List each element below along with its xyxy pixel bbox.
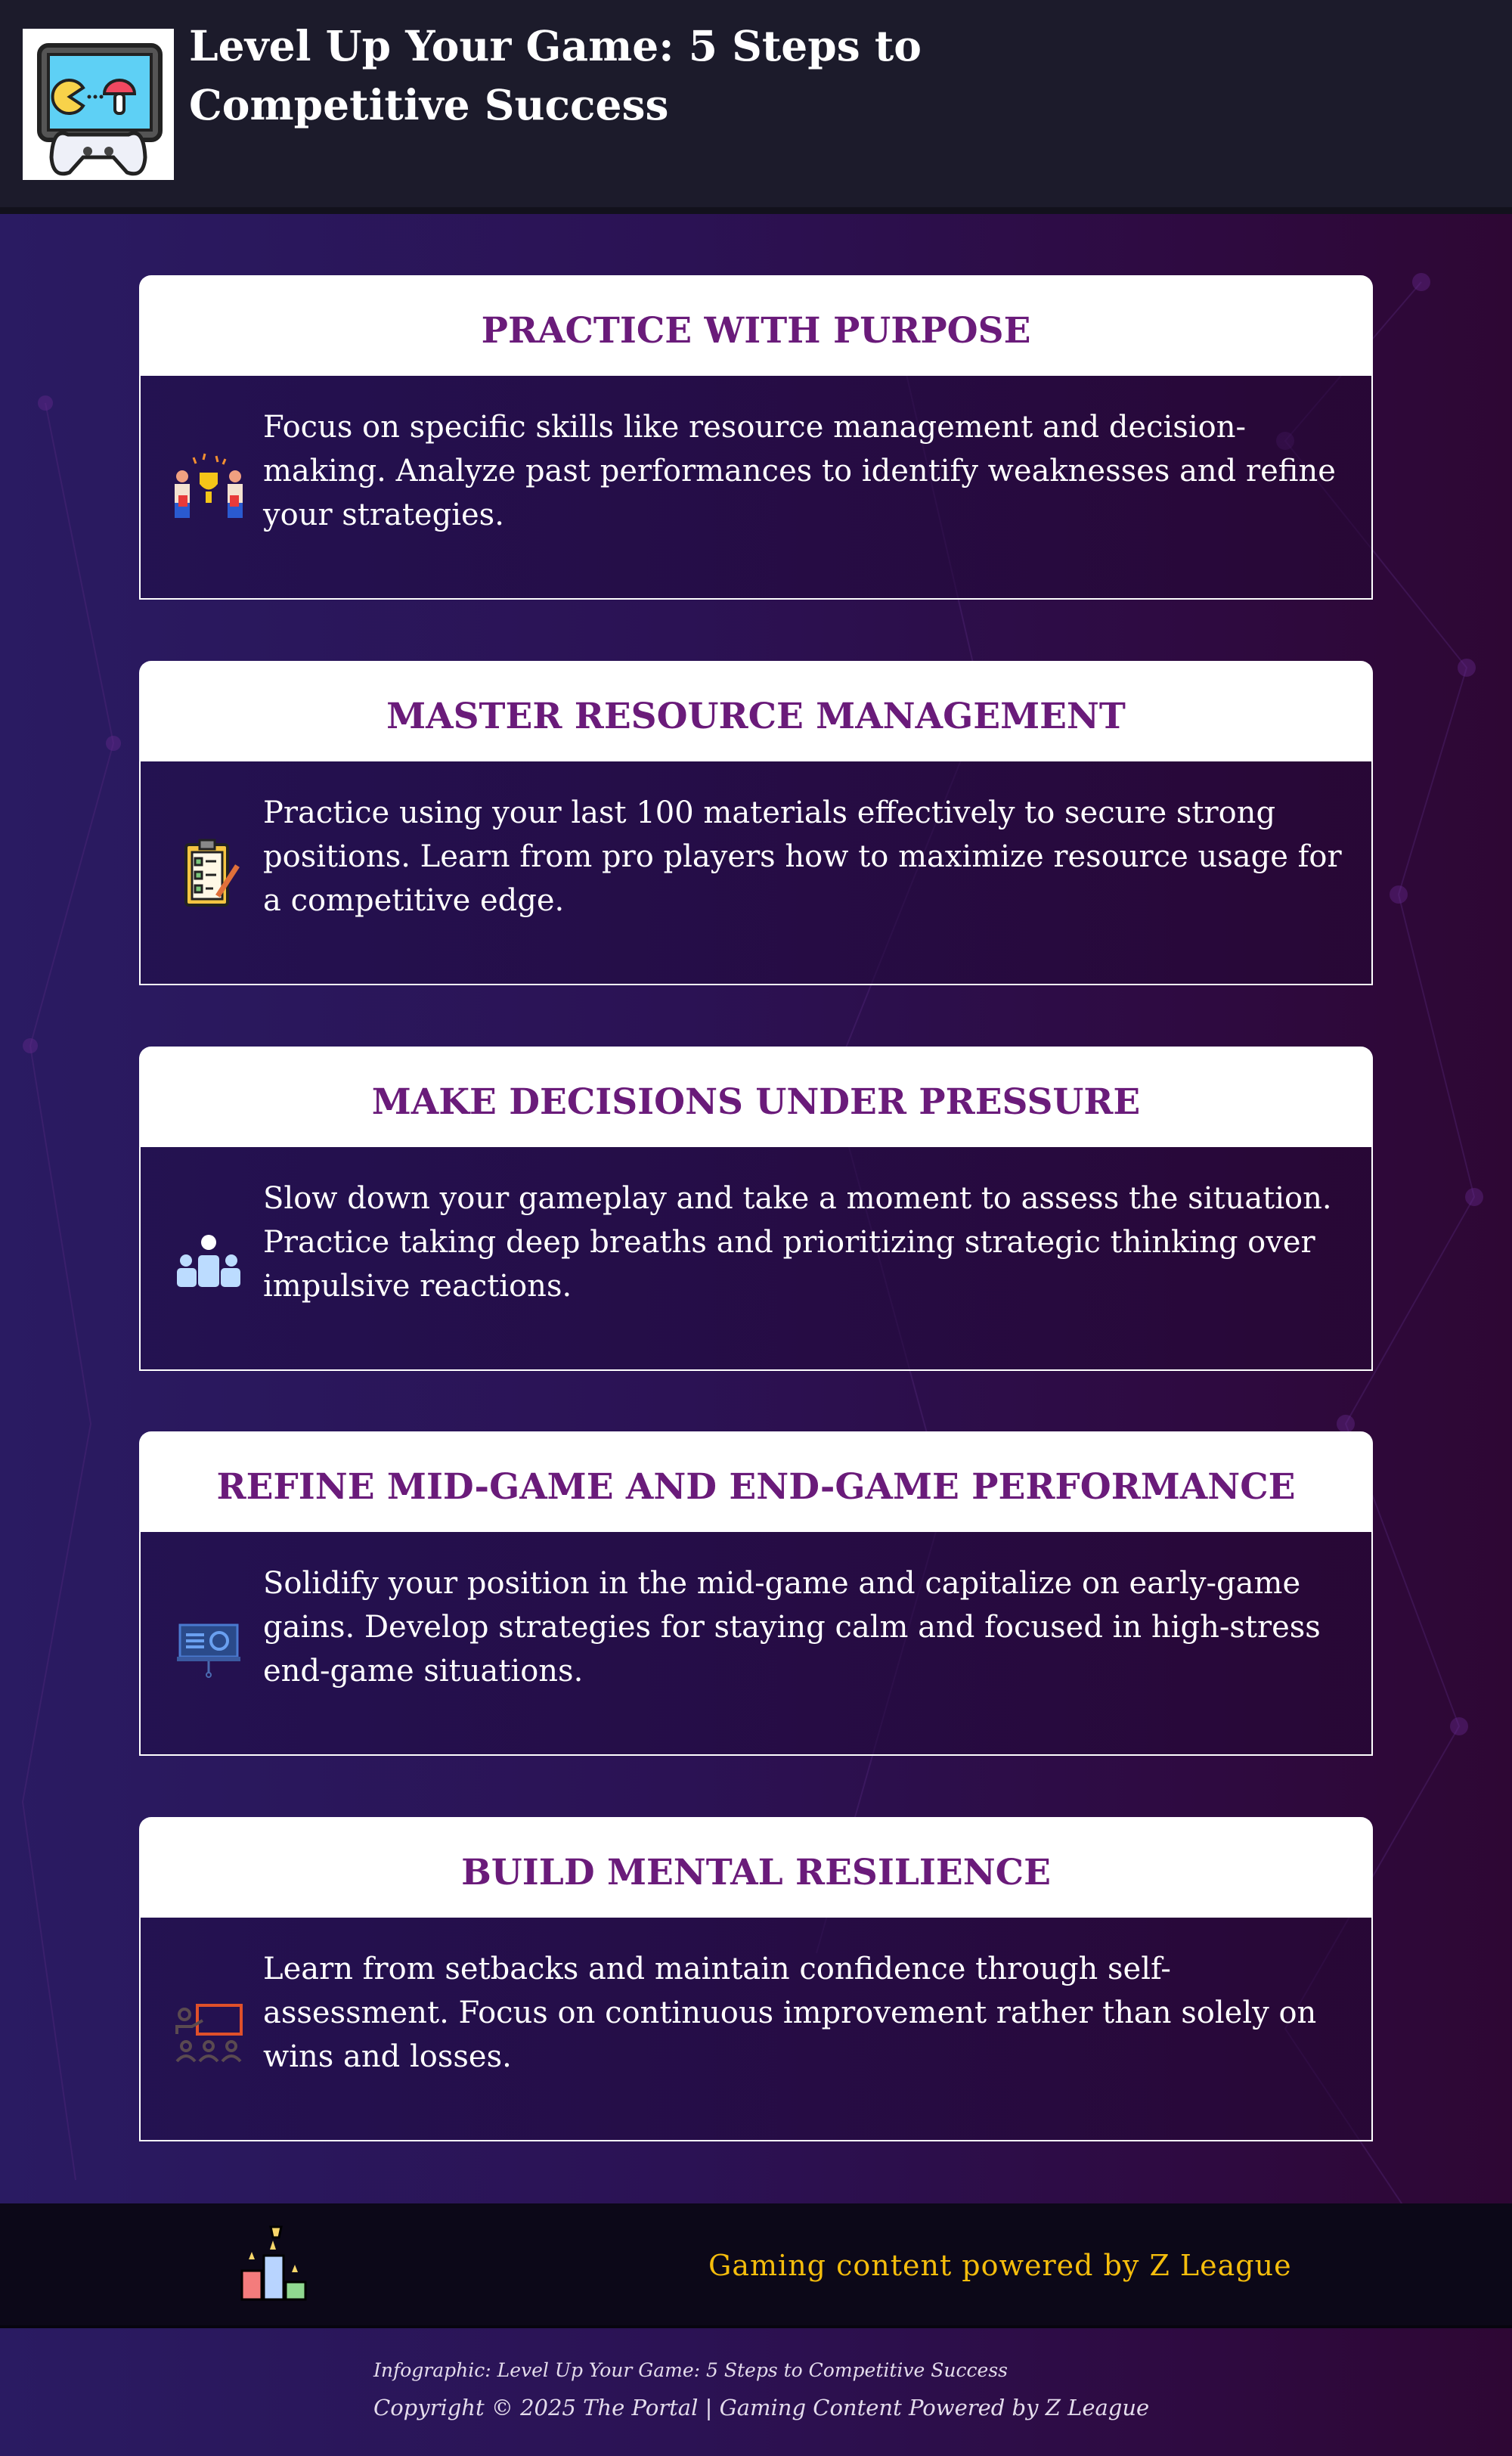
title: [189, 21, 922, 129]
text: Learn from setbacks and maintain confidence through self-: [263, 1952, 1171, 1986]
caption: Infographic: Level Up Your Game: 5 Steps to Competitive Success: [373, 2359, 1008, 2381]
text: assessment. Focus on continuous improvement rather than solely on: [263, 1996, 1316, 2030]
icon: classroom presentation: [175, 2004, 243, 2062]
icon: podium people: [177, 1235, 240, 1287]
panel: master resource management: [139, 661, 1373, 985]
heading: MAKE DECISIONS UNDER PRESSURE: [372, 1081, 1140, 1123]
text: your strategies.: [263, 498, 504, 532]
text: [263, 1566, 1321, 1688]
heading: BUILD MENTAL RESILIENCE: [461, 1852, 1051, 1893]
footer text: Gaming content powered by Z League: [708, 2249, 1292, 2282]
text: impulsive reactions.: [263, 1269, 572, 1304]
panel: make decisions under pressure: [139, 1047, 1373, 1371]
text: Focus on specific skills like resource management and decision-: [263, 410, 1246, 445]
heading: [139, 1047, 1373, 1147]
text: [263, 410, 1336, 532]
heading: [139, 275, 1373, 376]
panel: build mental resilience: [139, 1817, 1373, 2141]
logo: game controller icon: [23, 29, 174, 180]
icon: trophy celebration: [175, 454, 243, 518]
icon: clipboard checklist: [184, 839, 240, 907]
header: [0, 0, 1512, 214]
text: positions. Learn from pro players how to maximize resource usage for: [263, 839, 1342, 874]
text: Practice using your last 100 materials effectively to secure strong: [263, 795, 1275, 830]
text: [263, 1952, 1316, 2074]
text: Slow down your gameplay and take a moment to assess the situation.: [263, 1181, 1332, 1216]
heading: PRACTICE WITH PURPOSE: [482, 310, 1030, 352]
heading: MASTER RESOURCE MANAGEMENT: [386, 696, 1126, 737]
panel: practice with purpose: [139, 275, 1373, 600]
heading: [139, 1817, 1373, 1918]
heading: REFINE MID-GAME AND END-GAME PERFORMANCE: [217, 1466, 1295, 1508]
copyright: Copyright © 2025 The Portal | Gaming Content Powered by Z League: [373, 2395, 1149, 2420]
icon: projector screen: [177, 1624, 240, 1678]
text: Solidify your position in the mid-game and capitalize on early-game: [263, 1566, 1300, 1601]
text: a competitive edge.: [263, 883, 564, 918]
title: Level Up Your Game: 5 Steps to: [189, 21, 922, 70]
text: making. Analyze past performances to identify weaknesses and refine: [263, 454, 1336, 488]
heading: [139, 1431, 1373, 1532]
text: [263, 795, 1342, 918]
text: wins and losses.: [263, 2039, 512, 2074]
text: Practice taking deep breaths and prioritizing strategic thinking over: [263, 1225, 1315, 1260]
panel: refine mid-game and end-game performance: [139, 1431, 1373, 1756]
text: end-game situations.: [263, 1654, 583, 1688]
icon: podium bars: [240, 2226, 307, 2300]
heading: [139, 661, 1373, 761]
text: [263, 1181, 1332, 1304]
footer band: [0, 2203, 1512, 2328]
title: Competitive Success: [189, 80, 668, 129]
text: gains. Develop strategies for staying calm and focused in high-stress: [263, 1610, 1321, 1645]
